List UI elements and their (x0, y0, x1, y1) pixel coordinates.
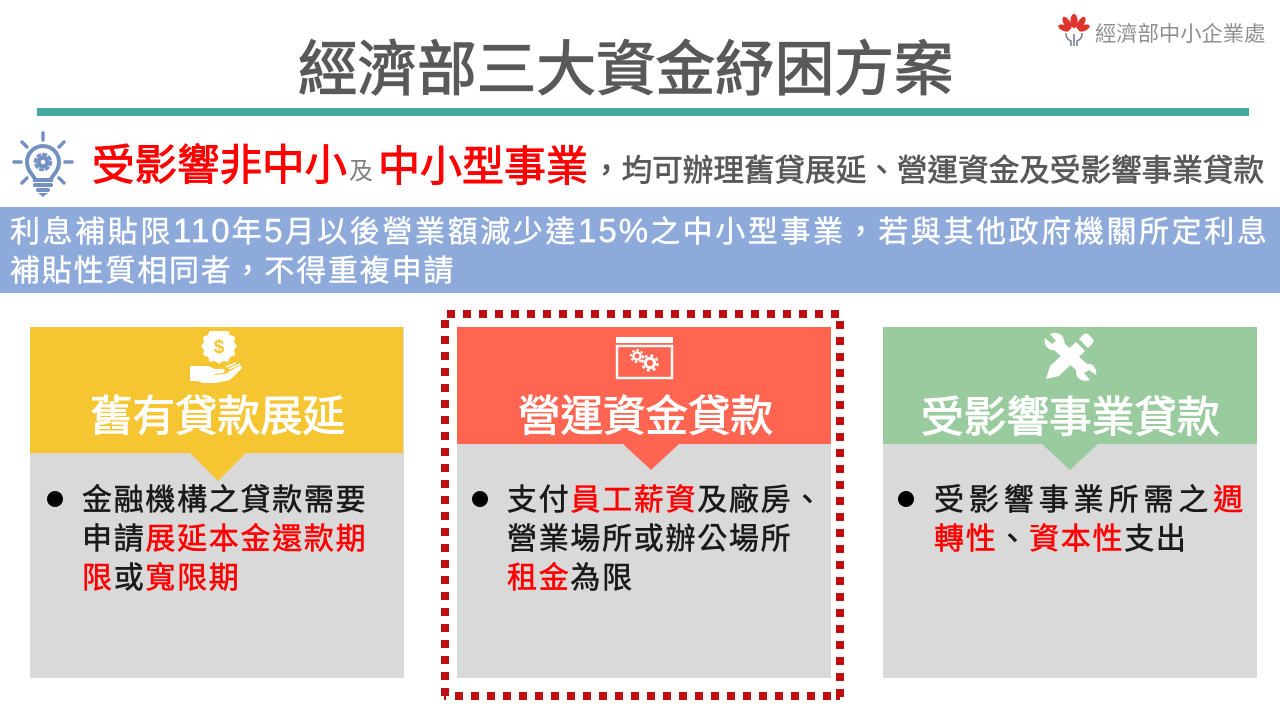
panel: affected business loan (883, 327, 1257, 678)
panel: working capital loan (457, 327, 831, 678)
header pointer (623, 444, 679, 470)
panel heading: 受影響事業貸款 (921, 394, 1220, 442)
panel header (883, 327, 1257, 444)
connector word: 及 (349, 158, 373, 185)
panel text: 支付員工薪資及廠房、 (507, 484, 824, 517)
header pointer (1042, 444, 1098, 470)
icon: wrench and pencil (1044, 332, 1096, 381)
subtitle line (92, 142, 1264, 190)
header pointer (190, 453, 246, 481)
notice line 1: 利息補貼限110年5月以後營業額減少達15%之中小型事業，若與其他政府機關所定利息 (10, 212, 1269, 249)
blue notice band (0, 207, 1280, 293)
subtitle remainder: ，均可辦理舊貸展延、營運資金及受影響事業貸款 (591, 154, 1264, 188)
icon: red flower logo (1058, 14, 1090, 46)
panel: existing loan extension (30, 327, 404, 678)
title underline (37, 108, 1249, 116)
panel text: 租金為限 (507, 562, 634, 595)
panel text: 金融機構之貸款需要 (82, 484, 367, 517)
panel header (457, 327, 831, 444)
icon: lightbulb with gear (12, 131, 74, 197)
panel text: 申請展延本金還款期 (82, 523, 367, 556)
bullet (472, 491, 488, 507)
panel text: 受影響事業所需之週 (934, 484, 1243, 517)
panel heading: 舊有貸款展延 (90, 394, 345, 441)
icon: hand with coin: $ (214, 337, 225, 358)
panel text: 限或寬限期 (82, 562, 241, 595)
panel text (934, 484, 1243, 556)
icon: window with gears (616, 337, 674, 380)
notice line 2: 補貼性質相同者，不得重複申請 (10, 255, 455, 288)
bullet (898, 491, 914, 507)
panel header (30, 327, 403, 453)
bullet (47, 491, 63, 507)
panel text: 營業場所或辦公場所 (507, 523, 792, 556)
logo: SME administration (1058, 14, 1265, 46)
highlight: SME: 中小型事業 (378, 143, 588, 190)
panel text (507, 484, 824, 595)
panel text (82, 484, 367, 595)
title: 經濟部三大資金紓困方案 (298, 36, 954, 103)
panel text: 轉性、資本性支出 (934, 523, 1188, 556)
highlight: non-SME: 受影響非中小 (92, 143, 347, 190)
logo text: 經濟部中小企業處 (1095, 22, 1265, 46)
icon: hand with coin (190, 331, 242, 383)
panel heading: 營運資金貸款 (518, 394, 773, 441)
